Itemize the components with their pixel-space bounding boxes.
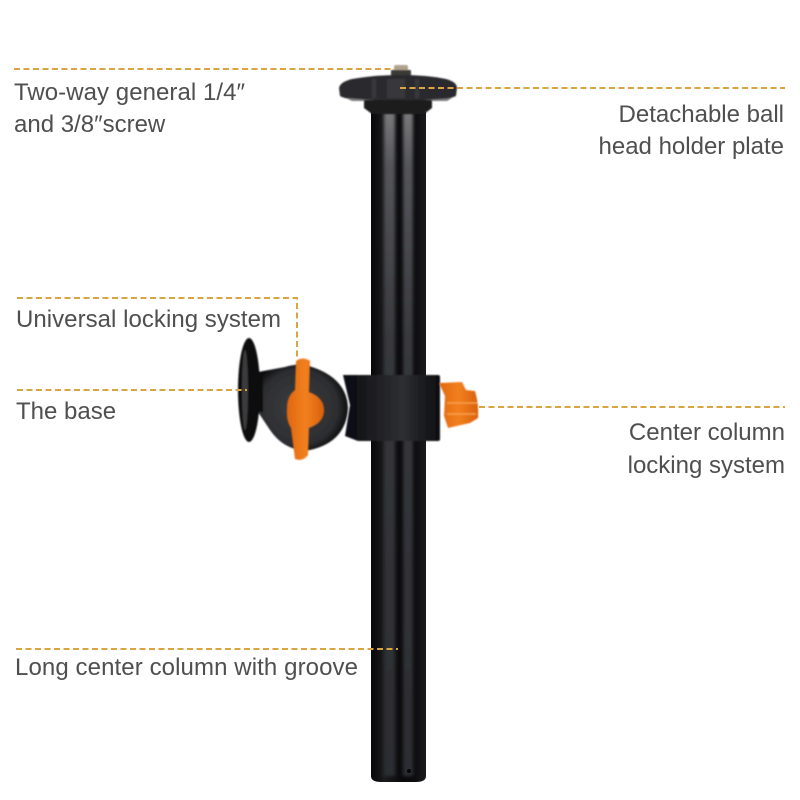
dashed leader: universal locking system — [17, 298, 297, 360]
clamp collar — [343, 375, 440, 441]
label: center column locking line 2: locking system — [628, 452, 785, 479]
label: universal locking system: Universal locking system — [16, 306, 281, 333]
label: center column locking: Center column — [629, 419, 785, 446]
center column — [371, 112, 426, 782]
orange column knob — [439, 382, 478, 428]
dashed leader: two-way screw — [14, 68, 394, 70]
dashed leader: long center column — [16, 648, 398, 650]
ball base disc — [238, 338, 348, 450]
label: two-way screw: Two-way general 1/4″ — [14, 79, 246, 106]
label: two-way screw line 2: and 3/8″screw — [14, 111, 166, 138]
orange wing bolt — [287, 358, 324, 460]
label: long center column: Long center column with groove — [15, 654, 358, 681]
holder plate — [339, 65, 457, 114]
label: holder plate line 2: head holder plate — [599, 133, 784, 160]
label: the base: The base — [16, 398, 116, 425]
dashed leader: the base — [17, 389, 247, 391]
dashed leader: center column locking system — [479, 406, 785, 408]
dashed leader: holder plate — [400, 87, 785, 89]
label: holder plate: Detachable ball — [619, 101, 784, 128]
